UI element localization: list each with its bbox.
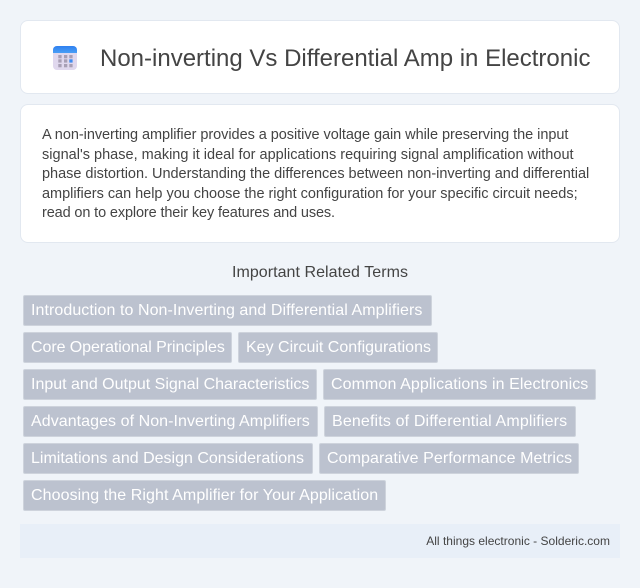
heading: important related terms: Important Related Terms [232,264,408,281]
tag [23,369,317,400]
tag [23,443,313,474]
panel: introduction text [20,104,620,243]
text block: introduction: signal's phase, making it ideal for applications requiring signal amplification without [42,146,574,162]
tag: Input and Output Signal Characteristics [31,376,309,393]
tag: Limitations and Design Considerations [31,450,304,467]
tag: Choosing the Right Amplifier for Your Application [31,487,378,504]
tag: Benefits of Differential Amplifiers [332,413,567,430]
text block: introduction: read on to explore their key features and uses. [42,205,335,221]
text block: introduction: A non-inverting amplifier provides a positive voltage gain while preserving the input [42,127,568,143]
tag [23,332,232,363]
tag [319,443,579,474]
tag [23,406,318,437]
tag: Comparative Performance Metrics [327,450,572,467]
tag list [23,295,596,511]
tag [23,480,386,511]
text block: introduction: phase distortion. Understanding the differences between non-inverting and differential [42,166,589,182]
title: Non-inverting Vs Differential Amp in Electronic [100,45,590,72]
tag: Advantages of Non-Inverting Amplifiers [31,413,310,430]
tag [324,406,576,437]
footer [20,524,620,558]
tag: Key Circuit Configurations [246,339,431,356]
text block: introduction: amplifiers can help you choose the right configuration for your specific circuit needs; [42,186,578,202]
footer credit: All things electronic - Solderic.com [426,534,610,548]
tag [238,332,438,363]
icon: calendar [53,46,77,70]
text block: introduction [42,127,589,221]
panel: title card [20,20,620,94]
tag: Core Operational Principles [31,339,225,356]
tag: Introduction to Non-Inverting and Differential Amplifiers [31,302,422,319]
tag [23,295,432,326]
tag [323,369,596,400]
tag: Common Applications in Electronics [331,376,588,393]
